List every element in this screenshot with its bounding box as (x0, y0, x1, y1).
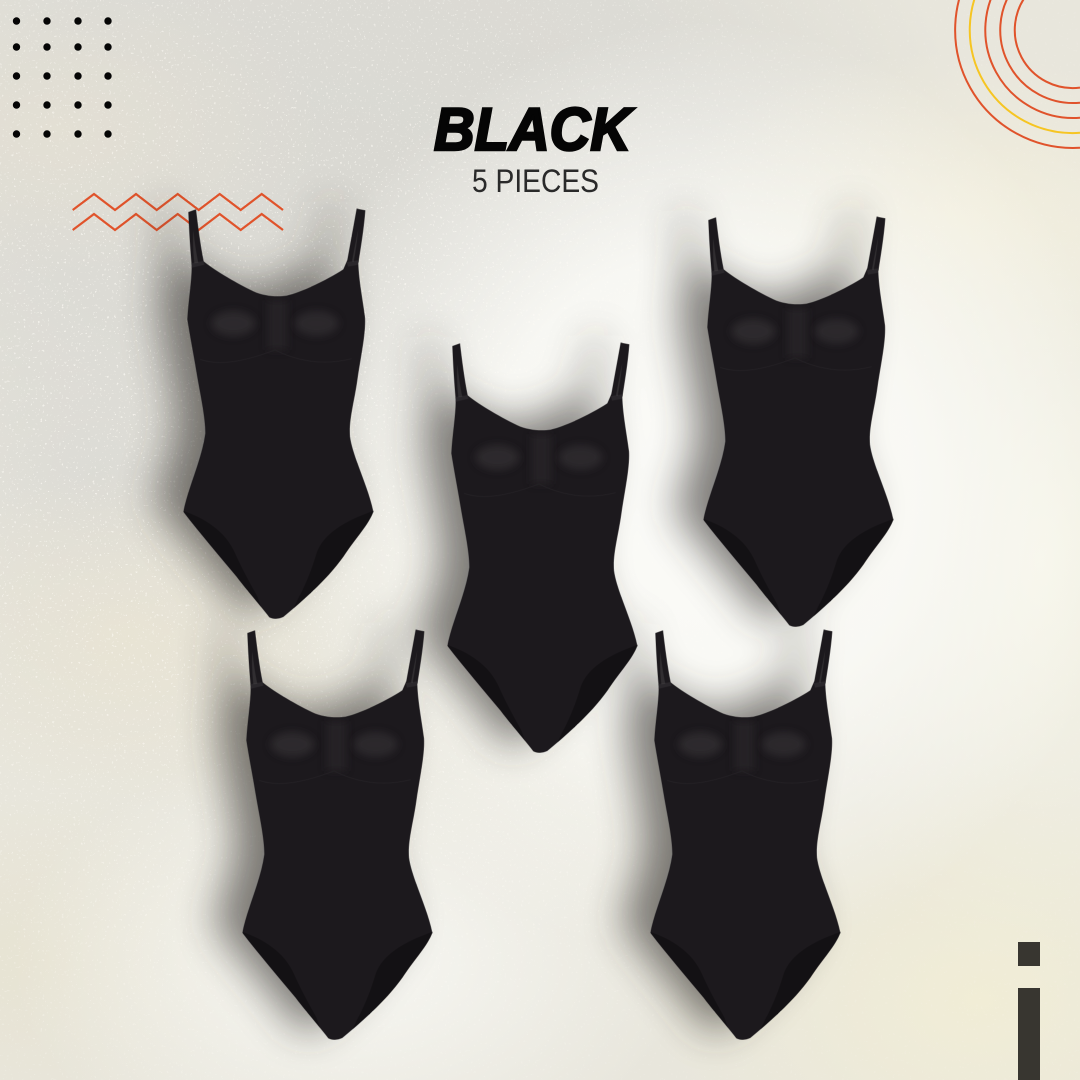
decorative zigzag lines (73, 194, 283, 230)
decorative dot grid (13, 17, 112, 138)
bodysuit: bottom right (637, 630, 850, 1044)
bodysuit: center (434, 343, 647, 757)
bodysuit: top left (170, 209, 383, 623)
subtitle: 5 PIECES (472, 163, 599, 199)
bodysuit: bottom left (229, 630, 442, 1044)
background texture (0, 0, 753, 1038)
bodysuit: top right (690, 217, 903, 631)
shadows behind garments (155, 201, 865, 1032)
brand mark: letter i (1018, 942, 1040, 1080)
title: BLACK (434, 96, 634, 163)
decorative concentric arcs (955, 0, 1080, 148)
